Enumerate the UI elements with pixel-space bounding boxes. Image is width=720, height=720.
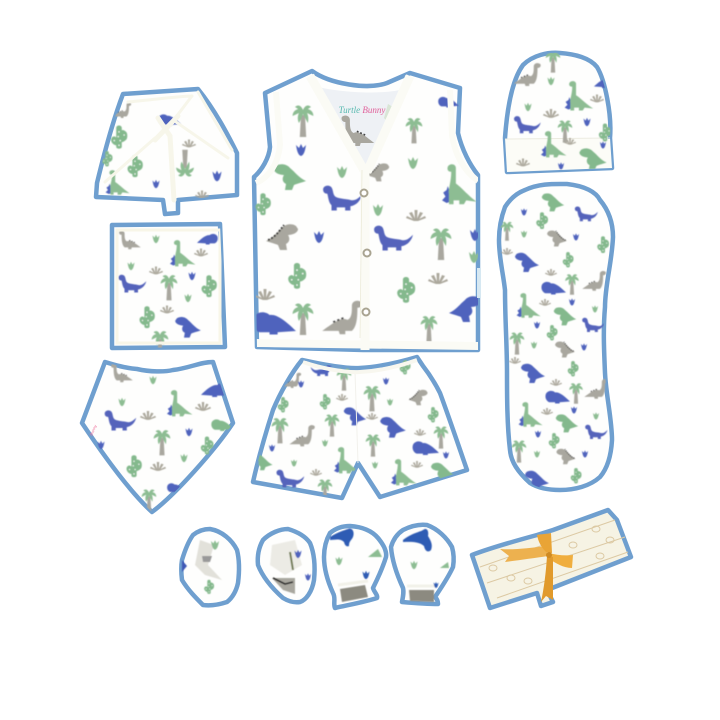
towel stripes and sheep print	[480, 520, 628, 598]
mitten two, crumpled	[258, 529, 315, 602]
burp cloth print motifs	[501, 193, 609, 490]
mitten one, crumpled	[181, 529, 239, 605]
nappy ties	[105, 92, 232, 200]
cap print motifs	[514, 51, 613, 170]
shorts print motifs	[253, 359, 455, 502]
mitten three print details	[330, 529, 382, 602]
mitten four print details	[403, 529, 449, 602]
vest snap buttons	[360, 190, 370, 316]
garment: cap	[505, 51, 613, 174]
rolled swaddle towel	[472, 510, 631, 608]
garment: long burp cloth	[499, 184, 613, 490]
vest neck opening with inner label	[322, 88, 398, 164]
bib print motifs	[98, 364, 234, 512]
vest neck opening with inner label: Turtle Bunny	[339, 105, 385, 115]
gold ribbon bow	[500, 533, 573, 602]
garment: vest	[253, 71, 481, 350]
product set illustration	[80, 50, 634, 610]
vest placket, collar and hem	[255, 76, 480, 350]
mitten four with dinosaur print	[391, 525, 454, 604]
mitten two print details	[270, 540, 311, 594]
bib pink label: Bunny	[88, 424, 98, 436]
garment: bandana bib	[82, 362, 234, 512]
mitten one print details	[182, 540, 222, 594]
mitten three with dinosaur print	[324, 526, 386, 608]
vest print motifs	[253, 97, 481, 341]
garment: square bib cloth	[112, 224, 225, 356]
vest side label	[477, 268, 481, 298]
square cloth print motifs	[118, 231, 218, 356]
nappy print motifs	[102, 103, 222, 198]
garment: shorts	[253, 357, 467, 502]
garment: tie nappy	[96, 89, 237, 214]
